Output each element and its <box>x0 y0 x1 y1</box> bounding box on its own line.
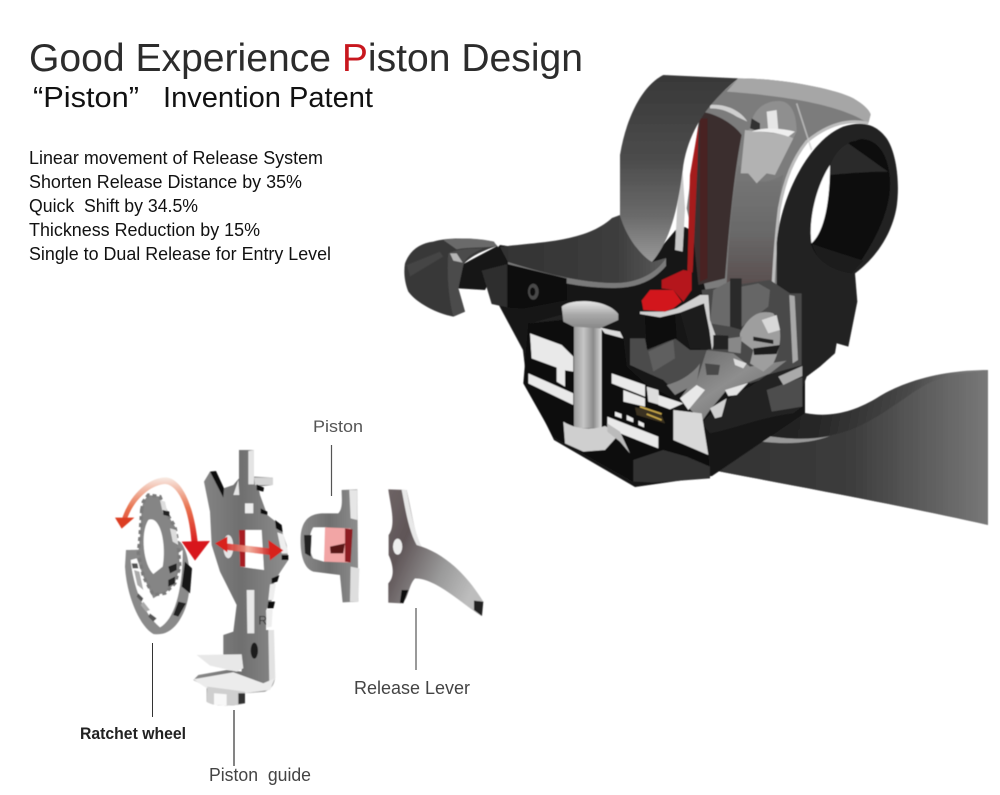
leader line: Piston guide <box>233 710 235 766</box>
title: Good Experience Piston Design <box>29 37 583 80</box>
stamped letter R: R <box>258 613 267 627</box>
label: Piston: Piston <box>313 417 363 436</box>
leader line: Release Lever <box>415 608 417 670</box>
black mechanism bed <box>523 320 710 483</box>
release lever part <box>388 489 483 616</box>
leader line: Piston <box>330 445 332 496</box>
subtitle <box>33 82 373 114</box>
arm lip <box>508 258 666 288</box>
red rotation arrow <box>115 477 210 561</box>
red actuator <box>662 270 692 302</box>
feature list <box>29 148 331 264</box>
feature list: Thickness Reduction by 15% <box>29 220 260 240</box>
base plate <box>680 350 787 422</box>
central mechanism <box>630 270 802 433</box>
window <box>239 530 264 570</box>
piston bolt <box>562 301 630 453</box>
bolt and plates <box>523 301 710 483</box>
leader line: Ratchet wheel <box>152 643 154 717</box>
shifter arm <box>500 215 666 283</box>
dark channel <box>691 112 742 285</box>
body silhouette <box>479 225 805 487</box>
housing shell <box>687 78 871 295</box>
light arc <box>710 105 747 122</box>
subtitle: “Piston” <box>33 82 139 114</box>
housing ridge <box>773 122 868 295</box>
subtitle: Invention Patent <box>163 82 373 114</box>
label: Piston guide: Piston guide <box>209 765 311 785</box>
barrel adjuster and left cavity <box>404 238 570 350</box>
gear <box>138 495 180 595</box>
feature list: Linear movement of Release System <box>29 148 323 168</box>
label: Release Lever: Release Lever <box>354 678 470 698</box>
upper chassis <box>702 280 802 383</box>
feature list: Shorten Release Distance by 35% <box>29 172 302 192</box>
ring clamp and right side body <box>777 124 898 413</box>
translucent housing and channel <box>620 75 871 295</box>
bottom shell <box>633 450 710 483</box>
outer cover sheet <box>620 75 738 262</box>
set screw <box>741 101 797 183</box>
ratchet block <box>630 338 707 390</box>
grey panel <box>727 165 783 295</box>
linear motion arrow <box>215 537 283 560</box>
red stripe <box>687 125 699 272</box>
gold pins <box>635 407 665 423</box>
ratchet wheel <box>125 495 192 634</box>
shifter lever blade <box>712 370 988 525</box>
knurled edge <box>257 484 288 608</box>
retaining clip <box>640 295 716 350</box>
shifter cutaway illustration <box>404 75 988 525</box>
piston part <box>301 489 359 602</box>
lever fold highlight <box>714 424 830 443</box>
housing top band <box>727 78 871 123</box>
feature list: Quick Shift by 34.5% <box>29 196 198 216</box>
feature list: Single to Dual Release for Entry Level <box>29 244 331 264</box>
exploded parts diagram <box>115 450 483 706</box>
label: Ratchet wheel: Ratchet wheel <box>80 724 186 743</box>
lever pivot block <box>702 365 802 433</box>
white stacked plates <box>528 333 708 455</box>
piston guide plate <box>193 450 288 706</box>
lever lower fold <box>712 370 988 525</box>
spring cam <box>740 312 780 372</box>
